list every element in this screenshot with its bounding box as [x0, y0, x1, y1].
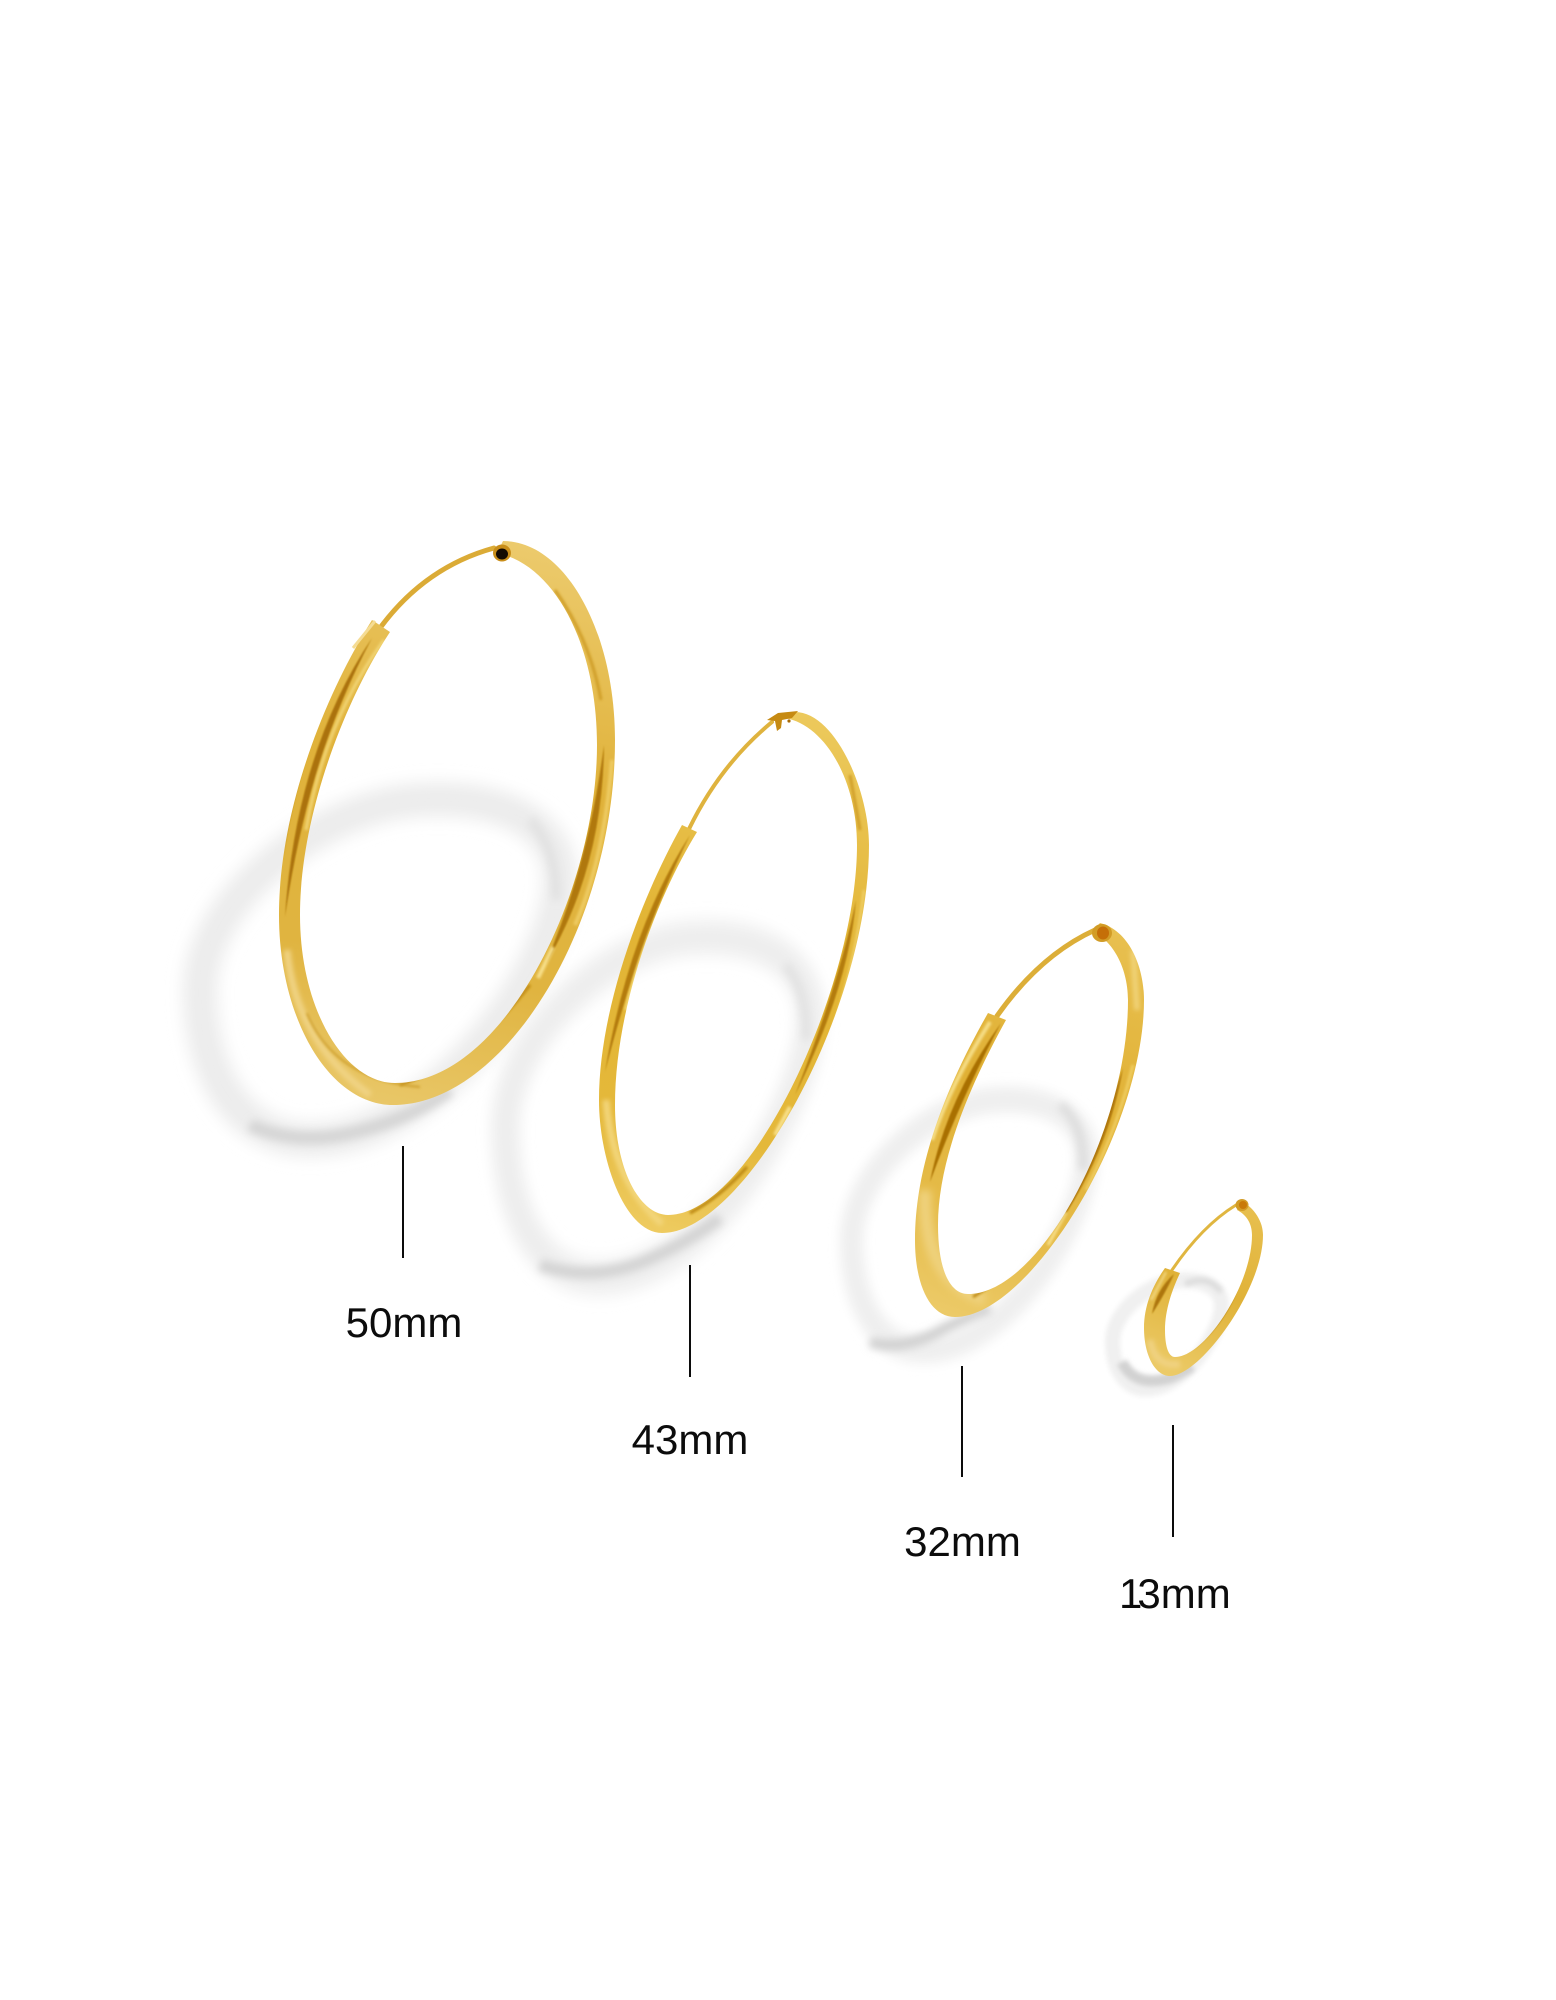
tick line: 43mm: [689, 1265, 691, 1377]
tick line: 13mm: [1172, 1425, 1174, 1537]
hoop opening: [1092, 924, 1112, 942]
shadow: 13mm hoop: [1113, 1280, 1222, 1389]
hoop tube: [1144, 1206, 1263, 1376]
label: 13mm: 13mm: [1119, 1570, 1231, 1617]
hoop opening: [493, 544, 511, 562]
label: 32mm: 32mm: [904, 1518, 1021, 1565]
hoop: 50mm: [279, 541, 615, 1105]
hoop opening: [1236, 1199, 1248, 1211]
hoop tube: [590, 700, 875, 1240]
shadow: 43mm hoop: [505, 937, 810, 1278]
hoop clasp slit: [353, 621, 375, 648]
label: 43mm: 43mm: [632, 1416, 748, 1463]
shadow: 32mm hoop: [852, 1100, 1087, 1350]
tick line: 50mm: [402, 1146, 404, 1258]
hoop wire: [1172, 1205, 1236, 1270]
hoop: 43mm: [590, 700, 875, 1240]
hoop: 13mm: [1140, 1195, 1265, 1380]
hoop wire: [380, 548, 494, 628]
shadow: 50mm hoop: [200, 799, 560, 1140]
hoop: 32mm: [915, 923, 1144, 1317]
hoop tube: [915, 923, 1144, 1317]
label: 50mm: 50mm: [346, 1299, 462, 1346]
tick line: 32mm: [961, 1366, 963, 1477]
hoop wire: [689, 722, 772, 829]
hoop wire: [997, 930, 1095, 1016]
hoop tube: [279, 541, 615, 1105]
hoop opening: [767, 711, 798, 731]
